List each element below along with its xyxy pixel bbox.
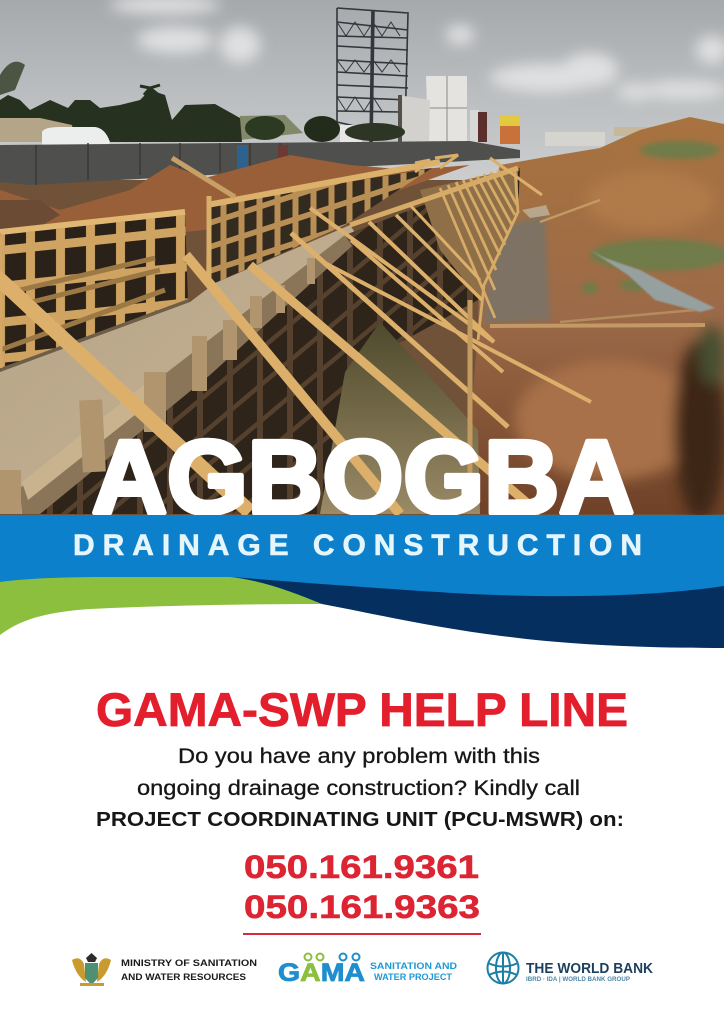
construction site photo <box>0 0 724 520</box>
logo: the world bank <box>488 952 653 984</box>
drain water <box>320 322 480 514</box>
logo: ministry of sanitation and water resources <box>72 953 257 986</box>
logo: gama sanitation and water project <box>278 954 457 987</box>
blue band <box>0 515 724 600</box>
ministry name: AND WATER RESOURCES <box>121 972 246 983</box>
subtitle: drainage construction: DRAINAGE CONSTRUCTION <box>73 529 642 562</box>
gama tagline <box>370 961 457 983</box>
dirt mounds behind formwork <box>0 155 470 232</box>
helpline message: Do you have any problem with this <box>178 745 540 768</box>
outer wall formwork <box>30 168 520 514</box>
icon: globe <box>488 952 518 984</box>
clouds <box>110 0 724 100</box>
far outer wall lattice <box>350 168 518 340</box>
world bank subline: IBRD · IDA | WORLD BANK GROUP <box>526 977 630 983</box>
gama wordmark with figures: GAMA <box>278 959 365 987</box>
navy swoosh <box>232 577 724 648</box>
ministry name: MINISTRY OF SANITATION <box>121 958 257 969</box>
green swoosh <box>0 577 322 635</box>
corrugated fence <box>0 141 520 185</box>
timber braces <box>0 158 591 514</box>
photo base <box>0 180 724 515</box>
icon: ghana coat of arms <box>72 953 111 986</box>
kerb and posts <box>0 235 352 514</box>
red underline <box>243 933 481 935</box>
helpline message: PROJECT COORDINATING UNIT (PCU-MSWR) on: <box>96 809 624 831</box>
distant billboards <box>340 76 520 144</box>
grass patches <box>582 141 724 294</box>
right earth bank <box>470 117 724 514</box>
sky <box>0 0 724 180</box>
helpline message <box>96 745 624 831</box>
phone numbers: 050.161.9361 <box>244 849 479 885</box>
ministry name <box>121 958 257 983</box>
far wall formwork <box>172 155 458 287</box>
gama tagline: WATER PROJECT <box>374 972 452 983</box>
earth shade <box>515 170 724 520</box>
world bank name: THE WORLD BANK <box>526 961 653 977</box>
treeline and buildings <box>0 62 660 146</box>
title: AGBOGBA: AGBOGBA <box>92 420 634 536</box>
heading: help line: GAMA-SWP HELP LINE <box>96 683 628 736</box>
phone numbers <box>244 849 480 925</box>
billboard frame <box>337 8 408 145</box>
phone numbers: 050.161.9363 <box>244 889 480 925</box>
helpline message: ongoing drainage construction? Kindly call <box>137 777 580 800</box>
left wall formwork <box>0 212 190 372</box>
gama tagline: SANITATION AND <box>370 961 457 972</box>
muddy channel <box>484 200 715 326</box>
concrete slab <box>0 225 360 514</box>
